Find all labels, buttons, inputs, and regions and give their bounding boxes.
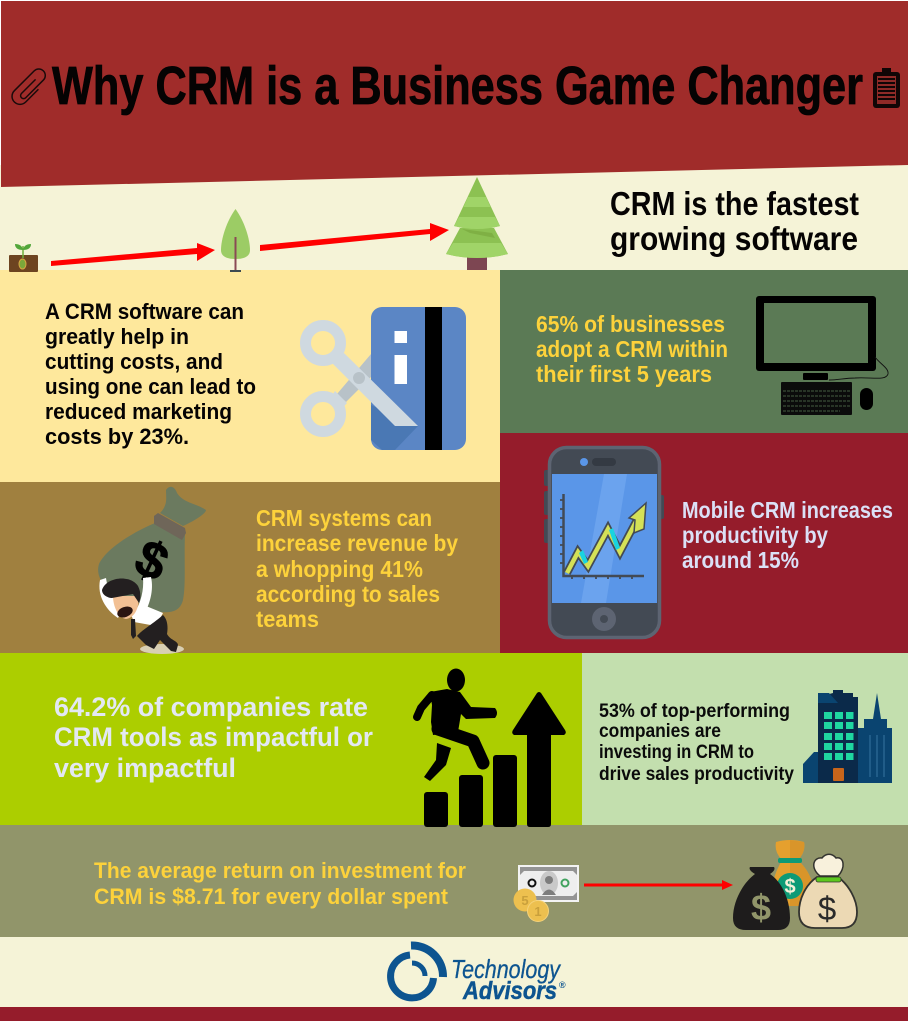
logo: Technology Advisors: Technology bbox=[451, 954, 562, 984]
text: cutting costs: using one can lead to bbox=[45, 374, 256, 399]
text: revenue: increase revenue by bbox=[256, 530, 458, 556]
text: top performers: companies are bbox=[599, 720, 721, 742]
panel: mobile bbox=[500, 433, 908, 653]
panel: footer bbox=[0, 937, 908, 1007]
text: revenue bbox=[256, 505, 458, 632]
icon: dollar bill and coins: 5 bbox=[521, 893, 529, 908]
panel: cutting costs bbox=[0, 270, 500, 482]
icon: smartphone with chart bbox=[544, 448, 664, 638]
icon: man carrying money bag bbox=[98, 487, 206, 654]
arrow: sapling to pine bbox=[260, 223, 449, 251]
icon: money bags: $ bbox=[784, 876, 796, 898]
text: top performers: investing in CRM to bbox=[599, 741, 754, 763]
text: impact bbox=[54, 692, 373, 783]
icon: dollar bill and coins: 1 bbox=[534, 904, 542, 919]
text: return on investment: CRM is $8.71 for every dollar spent bbox=[94, 884, 448, 909]
icon: clipboard bbox=[873, 68, 900, 108]
icon: dollar bill and coins bbox=[514, 865, 579, 922]
footer bar bbox=[0, 1007, 908, 1021]
arrow: seedling to sapling bbox=[51, 243, 215, 266]
logo: Technology Advisors bbox=[391, 945, 566, 1005]
icon: man carrying money bag: $ bbox=[126, 529, 177, 593]
text: revenue: CRM systems can bbox=[256, 505, 432, 531]
icon: desktop computer bbox=[756, 296, 888, 415]
text: mobile: around 15% bbox=[682, 547, 799, 573]
panel: title band bbox=[1, 1, 908, 187]
panel: impact bbox=[0, 487, 582, 827]
heading: fastest growing software bbox=[610, 185, 859, 257]
text: revenue: teams bbox=[256, 606, 319, 632]
icon: paperclip bbox=[9, 66, 50, 108]
icon: man climbing bars bbox=[417, 668, 566, 827]
icon: pine tree bbox=[446, 177, 508, 270]
arrow: bill to money bags bbox=[584, 880, 733, 890]
text: adoption: 65% of businesses bbox=[536, 311, 725, 337]
icon: money bags bbox=[733, 840, 857, 930]
text: impact: CRM tools as impactful or bbox=[54, 722, 373, 752]
logo: Technology Advisors: Advisors bbox=[462, 977, 557, 1005]
text: mobile: productivity by bbox=[682, 522, 828, 548]
logo: Technology Advisors: ® bbox=[559, 980, 566, 990]
panel: adoption bbox=[500, 270, 908, 433]
text: top performers: drive sales productivity bbox=[599, 763, 794, 785]
heading: fastest growing software: growing software bbox=[610, 220, 858, 257]
text: cutting costs: A CRM software can bbox=[45, 299, 244, 324]
text: cutting costs bbox=[45, 299, 256, 449]
text: adoption bbox=[536, 311, 728, 387]
icon: seedling bbox=[9, 244, 38, 272]
icon: office buildings bbox=[803, 690, 892, 783]
panel: revenue bbox=[0, 482, 500, 653]
text: top performers: 53% of top-performing bbox=[599, 700, 790, 722]
icon: scissors cutting card bbox=[306, 307, 466, 450]
text: cutting costs: costs by 23%. bbox=[45, 424, 189, 449]
text: mobile bbox=[682, 497, 893, 573]
text: revenue: a whopping 41% bbox=[256, 556, 423, 582]
text: impact: very impactful bbox=[54, 753, 236, 783]
text: top performers bbox=[599, 700, 794, 785]
heading: fastest growing software: CRM is the fastest bbox=[610, 185, 859, 222]
text: adoption: adopt a CRM within bbox=[536, 336, 728, 362]
text: return on investment bbox=[94, 858, 466, 909]
text: cutting costs: cutting costs, and bbox=[45, 349, 223, 374]
icon: sapling bbox=[221, 209, 250, 272]
text: cutting costs: reduced marketing bbox=[45, 399, 232, 424]
text: cutting costs: greatly help in bbox=[45, 324, 189, 349]
panel: top performers bbox=[582, 653, 908, 825]
icon: money bags: $ bbox=[751, 887, 771, 928]
icon: money bags: $ bbox=[818, 890, 836, 927]
text: revenue: according to sales bbox=[256, 581, 440, 607]
text: adoption: their first 5 years bbox=[536, 361, 712, 387]
text: impact: 64.2% of companies rate bbox=[54, 692, 368, 722]
text: return on investment: The average return on investment for bbox=[94, 858, 466, 883]
panel: return on investment bbox=[0, 825, 908, 937]
